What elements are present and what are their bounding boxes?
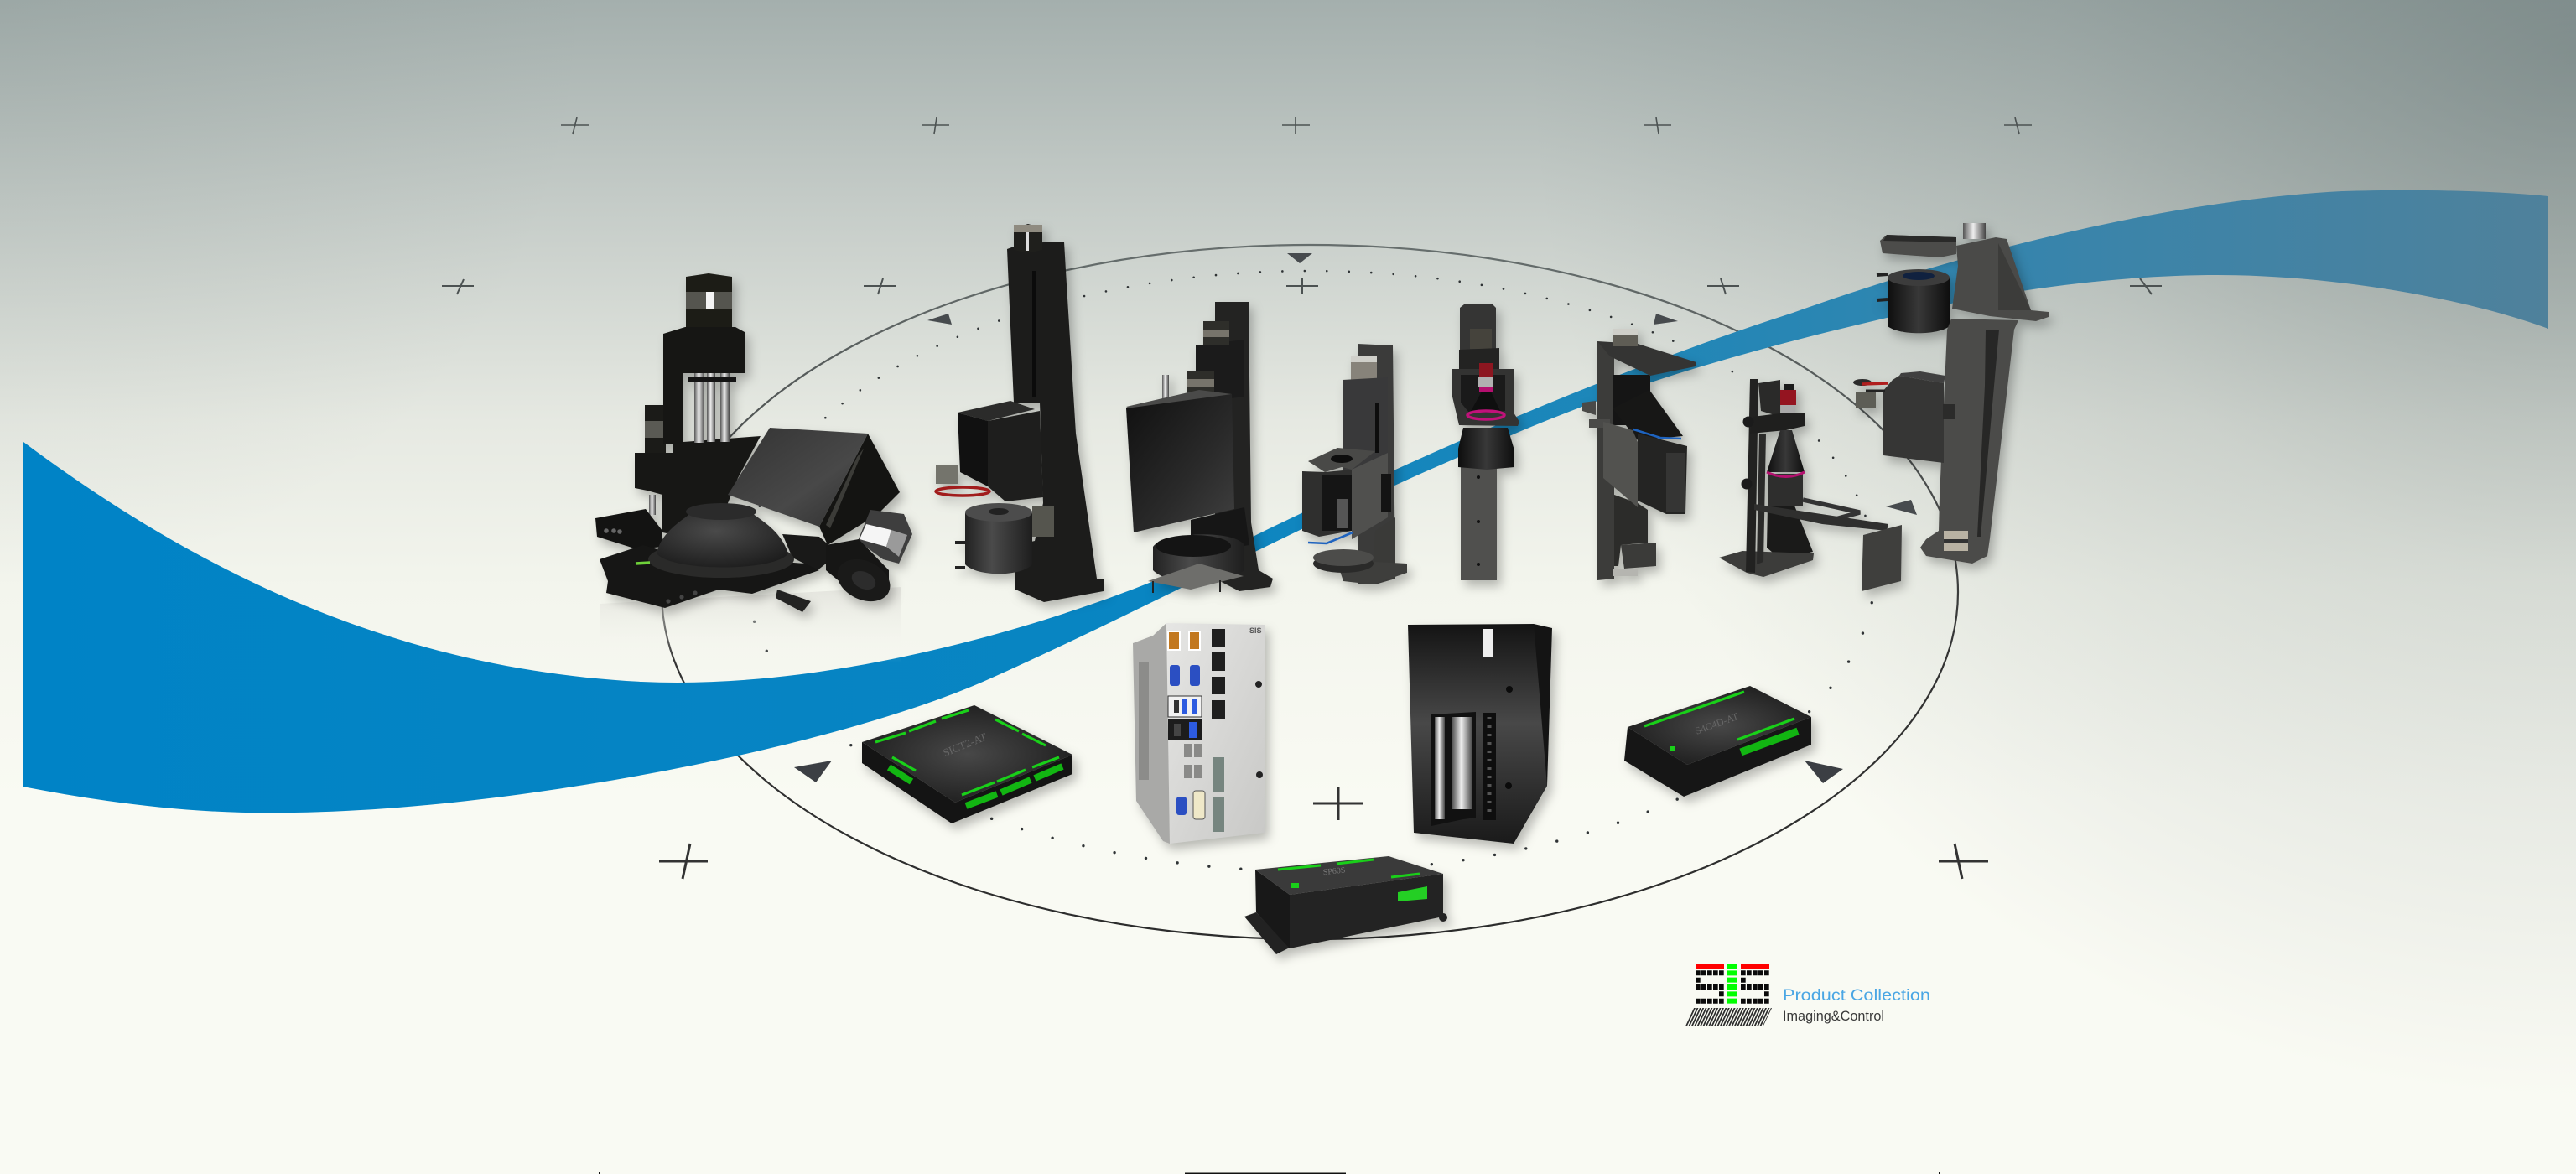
product: I/O box bottom <box>1244 856 1447 954</box>
bottom edge marks <box>599 1172 1940 1174</box>
product: silver industrial PC: SIS <box>1249 626 1262 635</box>
logo title: Product Collection <box>1783 987 1930 1005</box>
product: I/O board left: SICT2-AT <box>941 730 989 759</box>
product: I/O box bottom: SP60S <box>1322 866 1346 877</box>
dotted inner ellipse <box>746 271 1875 871</box>
product: lens stand with swing arm <box>1719 379 1902 591</box>
logo mark <box>1685 964 1772 1026</box>
product: black industrial PC <box>1408 624 1552 844</box>
blue swoosh band <box>23 190 2548 813</box>
product: side-mounted stage module <box>1302 344 1407 584</box>
product: box camera on rail <box>1126 302 1273 593</box>
product: tall right column with cylinder and box <box>1853 223 2049 564</box>
product: tall column with cylinder light <box>936 224 1104 602</box>
product: dual-axis frame module <box>1582 329 1696 580</box>
reflection under stage <box>600 587 901 662</box>
logo subtitle: Imaging&Control <box>1783 1008 1884 1024</box>
direction triangles <box>794 253 1917 783</box>
large ring ellipse <box>662 245 1958 939</box>
product: I/O board right: S4C4D-AT <box>1694 710 1741 737</box>
product: silver industrial PC <box>1133 623 1265 844</box>
product: conical lens on column <box>1452 304 1519 580</box>
crosshair markers <box>442 117 2162 879</box>
product: I/O board left <box>862 705 1072 823</box>
product: I/O board right <box>1624 686 1811 797</box>
logo: SIS Product Collection <box>1685 964 1930 1026</box>
product: microscope stage with dome light <box>595 273 912 612</box>
